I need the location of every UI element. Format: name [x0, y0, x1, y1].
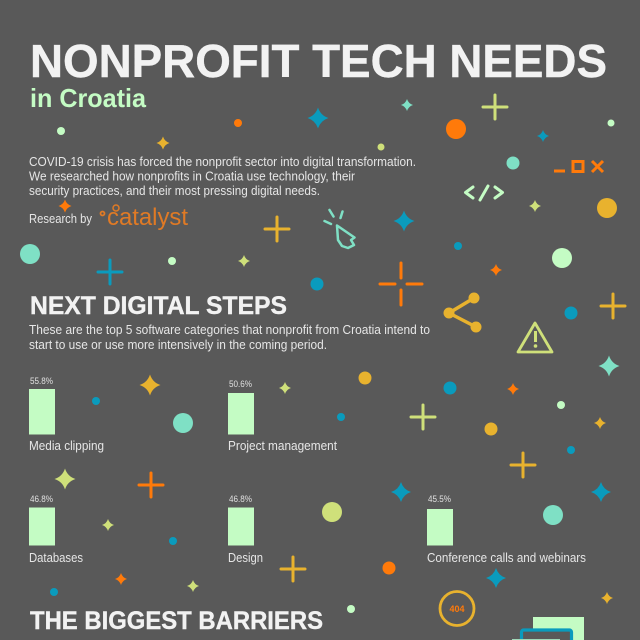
bar chart: design: 46.8% — [229, 494, 252, 505]
bar chart: conference calls and webinars: 45.5% — [428, 494, 451, 505]
bar chart: conference calls and webinars: Conference calls and webinars — [427, 550, 586, 565]
icon: 404 ring: 404 — [449, 604, 465, 614]
next digital steps description: These are the top 5 software categories that nonprofit from Croatia intend to — [29, 322, 430, 337]
background dots — [20, 119, 617, 613]
title: NONPROFIT TECH NEEDS — [30, 35, 607, 87]
intro text: security practices, and their most pressing digital needs. — [29, 183, 320, 198]
subtitle: in Croatia — [30, 83, 147, 113]
next digital steps description: start to use or use more intensively in the coming period. — [29, 337, 327, 352]
bar chart: media clipping: 55.8% — [30, 376, 53, 387]
bar chart: project management — [228, 379, 337, 453]
next digital steps description — [29, 322, 430, 352]
icon: window controls — [554, 161, 603, 172]
icon: warning triangle — [518, 323, 552, 352]
background plus crosses — [98, 95, 625, 581]
bar chart: project management: 50.6% — [229, 379, 252, 390]
intro text: We researched how nonprofits in Croatia use technology, their — [29, 168, 356, 184]
bar chart: design — [228, 494, 263, 565]
icon: clicking cursor — [324, 210, 354, 248]
bar chart: databases: Databases — [29, 550, 83, 565]
bar chart: project management: Project management — [228, 438, 337, 453]
intro text — [29, 154, 416, 198]
heading: next digital steps: NEXT DIGITAL STEPS — [30, 292, 287, 320]
icon: browser windows — [512, 617, 584, 640]
heading: the biggest barriers: THE BIGGEST BARRIERS — [30, 607, 323, 635]
bar chart: conference calls and webinars — [427, 494, 586, 565]
bar chart: design: Design — [228, 550, 263, 565]
icon: 404 ring — [440, 592, 474, 626]
icon: code brackets — [466, 186, 502, 200]
bar chart: media clipping — [29, 376, 104, 453]
bar chart: databases — [29, 494, 83, 565]
bar chart: media clipping: Media clipping — [29, 438, 104, 453]
research by credit: Research by — [29, 211, 93, 226]
background four-point stars — [54, 99, 620, 604]
icon: share — [444, 293, 481, 332]
catalyst logo: catalyst — [107, 204, 188, 231]
intro text: COVID-19 crisis has forced the nonprofit sector into digital transformation. — [29, 154, 416, 169]
bar chart: databases: 46.8% — [30, 494, 53, 505]
